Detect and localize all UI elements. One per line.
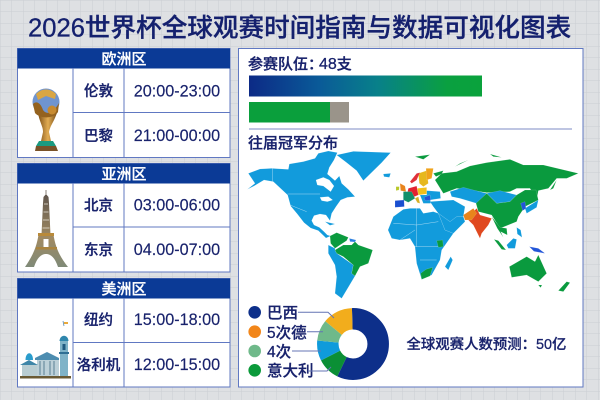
row: New York: 15:00-18:00 [134, 311, 220, 329]
icon: trophy [32, 88, 60, 151]
map: Americas and Greenland [247, 151, 391, 298]
legend: 5 times Germany: 5次德 [267, 324, 307, 342]
row: New York: 纽约 [84, 312, 113, 329]
row: Los Angeles: 12:00-15:00 [134, 356, 220, 374]
header: Asia: 亚洲区 [101, 166, 147, 183]
icon: Eiffel tower [25, 190, 68, 267]
bar: stacked green and grey [249, 102, 349, 122]
callout: global viewers forecast: 全球观赛人数预测：50亿 [406, 335, 566, 353]
panel: Asia schedule [18, 164, 230, 272]
panel: Europe schedule [18, 48, 230, 158]
legend [248, 305, 314, 380]
heading: teams: 参赛队伍： [248, 56, 323, 73]
row: Los Angeles [77, 356, 220, 374]
legend: Italy: 意大利 [267, 361, 314, 380]
header: Americas [18, 278, 230, 298]
heading: teams: 48 [319, 56, 337, 73]
row: Beijing: 03:00-06:00 [134, 196, 220, 214]
map: world champions [247, 151, 578, 298]
header: Europe: 欧洲区 [101, 50, 147, 68]
row: Beijing: 北京 [84, 196, 113, 214]
row: London: 伦敦 [84, 82, 113, 100]
header: Asia [18, 164, 230, 184]
bar: teams gradient [249, 76, 482, 96]
header: Americas: 美洲区 [101, 280, 147, 298]
row: Paris: 巴黎 [84, 128, 113, 145]
panel: statistics and map [238, 48, 583, 387]
row: Tokyo: 04.00-07:00 [134, 241, 220, 259]
legend: Brazil: 巴西 [267, 305, 298, 322]
row: Beijing [84, 196, 220, 214]
row: New York [84, 311, 220, 329]
row: Tokyo [84, 241, 220, 259]
header: Europe [18, 48, 230, 68]
legend: 4 times: 4次 [267, 343, 291, 361]
map: Eastern hemisphere [388, 154, 578, 292]
heading: champions map: 往届冠军分布 [248, 134, 338, 152]
row: London: 20:00-23:00 [134, 82, 220, 100]
row: Tokyo: 东京 [84, 241, 113, 259]
heading: teams: 支 [337, 56, 352, 73]
row: Paris [84, 127, 220, 145]
row: London [84, 82, 220, 100]
panel: Americas schedule [18, 278, 230, 387]
row: Los Angeles: 洛利机 [77, 357, 121, 374]
title: 2026世界杯全球观赛时间指南与数据可视化图表 [28, 14, 571, 42]
donut chart [292, 312, 378, 371]
row: Paris: 21:00-00:00 [134, 127, 220, 145]
icon: building [20, 321, 71, 378]
